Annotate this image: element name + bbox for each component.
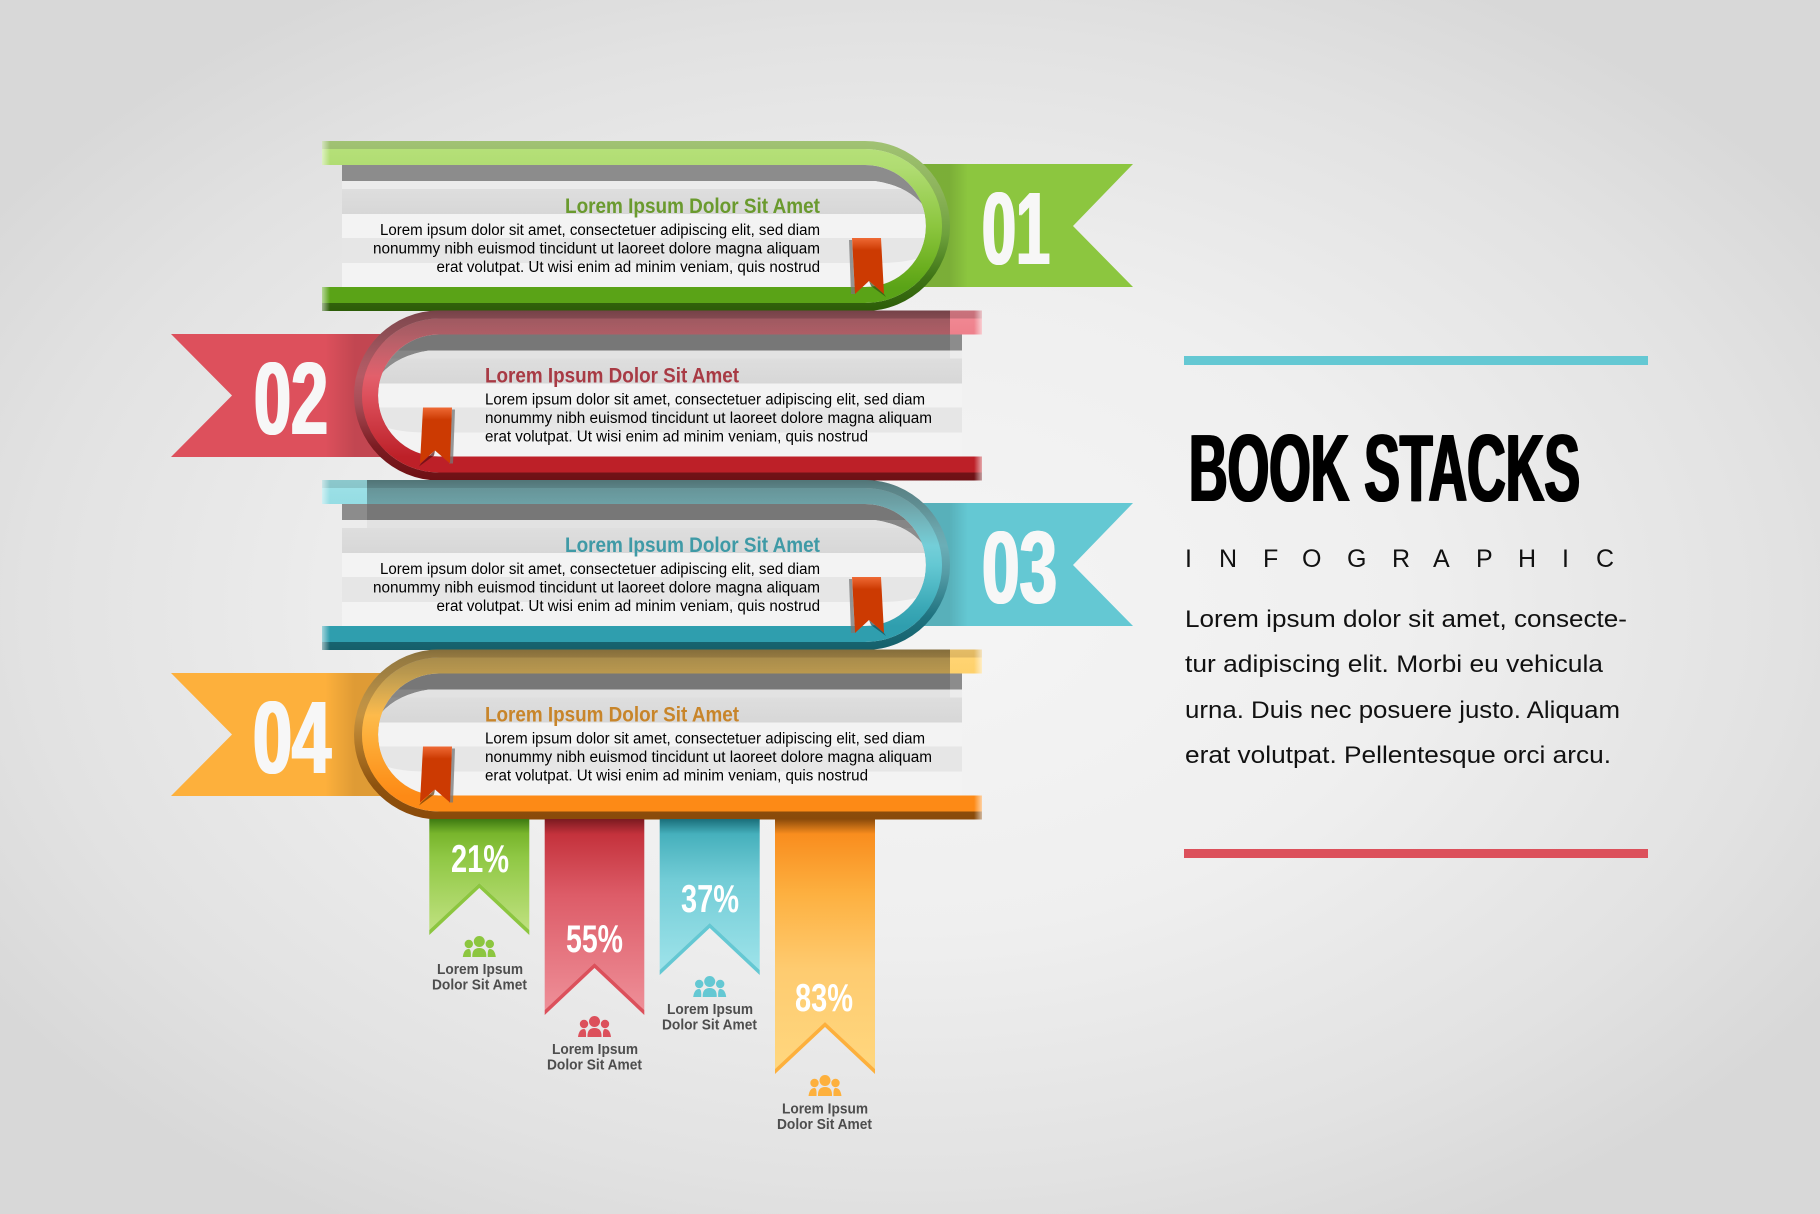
stat ribbon: 83%: 83%: [795, 977, 853, 1020]
stat caption: 37%: Lorem Ipsum: [667, 1002, 753, 1018]
book 1 bookmark: [849, 238, 886, 297]
subtitle: INFOGRAPHIC: [1185, 545, 1614, 573]
book 2 body text: Lorem ipsum dolor sit amet, consectetuer adipiscing elit, sed diam: [485, 392, 925, 408]
book 2 bookmark: [419, 408, 455, 466]
book 3 body text: erat volutpat. Ut wisi enim ad minim veniam, quis nostrud: [436, 598, 820, 615]
divider: red bar: [1184, 849, 1648, 858]
stat caption: 21%: [432, 962, 527, 994]
stat ribbon: 21%: [429, 819, 529, 935]
stat caption: 37%: Dolor Sit Amet: [662, 1018, 757, 1034]
book 4 body text: Lorem ipsum dolor sit amet, consectetuer adipiscing elit, sed diam: [485, 730, 925, 748]
book 4 cover: [354, 650, 982, 820]
book 4 body text: [485, 730, 932, 784]
book 2: red: [354, 310, 982, 480]
paragraph: [1185, 606, 1627, 769]
ribbon: 03: 03: [982, 510, 1057, 625]
stat caption: 21%: Lorem Ipsum: [437, 962, 523, 978]
stat caption: 55%: [547, 1042, 642, 1074]
ribbon: 03: [915, 503, 1133, 626]
stat caption: 83%: Lorem Ipsum: [782, 1102, 868, 1118]
book 4: orange: [354, 650, 982, 820]
book 1 body text: Lorem ipsum dolor sit amet, consectetuer adipiscing elit, sed diam: [380, 222, 820, 239]
ribbon: 02: 02: [254, 341, 328, 456]
stat ribbon: 37%: [660, 819, 760, 975]
ribbon: 01: [915, 164, 1133, 287]
book 4 heading: Lorem Ipsum Dolor Sit Amet: [485, 704, 739, 726]
book 3 cover: [322, 480, 967, 650]
stat caption: 37%: [662, 1002, 757, 1034]
stat ribbon: 21%: 21%: [451, 838, 509, 881]
paragraph: Lorem ipsum dolor sit amet, consecte-: [1185, 606, 1627, 633]
stat ribbon: 37%: 37%: [681, 878, 739, 921]
book 2 heading: Lorem Ipsum Dolor Sit Amet: [485, 364, 739, 388]
book 4 bookmark: [419, 746, 455, 806]
book 1: green: [322, 141, 950, 311]
stat caption: 55%: Dolor Sit Amet: [547, 1058, 642, 1074]
ribbon: 04: [171, 673, 390, 796]
book 3 body text: [373, 561, 820, 615]
stat caption: 83%: Dolor Sit Amet: [777, 1117, 872, 1133]
icon: people teal: [693, 976, 726, 997]
icon: people green: [463, 936, 496, 957]
book 1 body text: nonummy nibh euismod tincidunt ut laoreet dolore magna aliquam: [373, 241, 820, 258]
book 1 cover: [322, 141, 950, 311]
book 4 body text: nonummy nibh euismod tincidunt ut laoreet dolore magna aliquam: [485, 749, 932, 766]
stat caption: 21%: Dolor Sit Amet: [432, 978, 527, 994]
stat ribbon: 83%: [775, 819, 875, 1074]
book 3 body text: Lorem ipsum dolor sit amet, consectetuer adipiscing elit, sed diam: [380, 561, 820, 578]
book 2 body text: nonummy nibh euismod tincidunt ut laoreet dolore magna aliquam: [485, 410, 932, 427]
icon: people red: [578, 1016, 611, 1037]
book 1 body text: erat volutpat. Ut wisi enim ad minim veniam, quis nostrud: [436, 259, 820, 276]
book 2 body text: erat volutpat. Ut wisi enim ad minim veniam, quis nostrud: [485, 428, 868, 446]
ribbon: 04: 04: [253, 680, 331, 795]
paragraph: urna. Duis nec posuere justo. Aliquam: [1185, 697, 1620, 724]
book 3 body text: nonummy nibh euismod tincidunt ut laoreet dolore magna aliquam: [373, 580, 820, 597]
icon: people orange: [808, 1075, 842, 1096]
stat caption: 83%: [777, 1102, 872, 1133]
stat ribbon: 55%: 55%: [566, 918, 623, 961]
book 1 heading: Lorem Ipsum Dolor Sit Amet: [565, 195, 820, 218]
book 4 body text: erat volutpat. Ut wisi enim ad minim veniam, quis nostrud: [485, 768, 868, 784]
book 3 heading: Lorem Ipsum Dolor Sit Amet: [565, 534, 820, 557]
paragraph: tur adipiscing elit. Morbi eu vehicula: [1185, 651, 1603, 678]
book 2 cover: [354, 310, 982, 480]
stat caption: 55%: Lorem Ipsum: [552, 1042, 638, 1058]
paragraph: erat volutpat. Pellentesque orci arcu.: [1185, 742, 1611, 769]
stat ribbon: 55%: [545, 819, 644, 1015]
ribbon: 02: [171, 334, 390, 457]
divider: teal bar: [1184, 356, 1648, 365]
book 3 bookmark: [849, 577, 886, 636]
book 1 body text: [373, 222, 820, 276]
book 3: teal: [322, 480, 967, 650]
ribbon: 01: 01: [982, 171, 1050, 286]
book 2 body text: [485, 392, 932, 446]
